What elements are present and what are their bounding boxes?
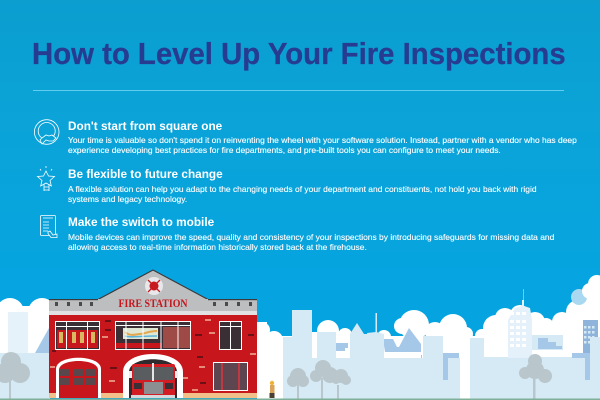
window insets on light buildings xyxy=(443,338,590,380)
roof pediment xyxy=(98,270,208,311)
brick wall xyxy=(49,315,257,393)
text: square one: Your time is valuable so don't spend it on reinventing the wheel with your software solution. Instead, partner with a vendor who has deep xyxy=(68,135,577,145)
upper right window xyxy=(219,321,242,350)
text: mobile xyxy=(68,232,554,252)
heading: square one: Don't start from square one xyxy=(68,119,222,133)
lower right window xyxy=(213,362,248,391)
center bay with fire engine xyxy=(123,354,183,398)
icon: mobile tablet with hand xyxy=(40,215,58,238)
text: flexible xyxy=(68,184,537,204)
text: flexible: A flexible solution can help you adapt to the changing needs of your department and constituents, not hold you back with rigid xyxy=(68,184,537,194)
firefighter xyxy=(270,381,274,398)
left garage door xyxy=(56,358,101,398)
heading: flexible: Be flexible to future change xyxy=(68,167,223,181)
text: square one xyxy=(68,135,577,155)
heading: mobile: Make the switch to mobile xyxy=(68,215,214,229)
back buildings medium blue xyxy=(35,328,422,363)
text: mobile: allowing access to real-time information historically stored back at the firehouse. xyxy=(68,242,367,252)
title: How to Level Up Your Fire Inspections xyxy=(32,37,566,71)
bricks xyxy=(50,319,256,391)
tower windows, right xyxy=(583,320,598,353)
trees xyxy=(0,352,552,399)
text: square one: experience developing best practices for fire departments, and pre-built tools you can configure to meet your needs. xyxy=(68,145,501,155)
front buildings light blue xyxy=(0,310,600,400)
upper left window xyxy=(55,321,100,350)
icon: handshake in circle xyxy=(34,119,60,145)
text: flexible: systems and legacy technology. xyxy=(68,194,187,204)
sign text: FIRE STATION xyxy=(118,296,188,310)
upper middle window xyxy=(115,321,191,350)
tower with windows xyxy=(508,289,532,358)
divider line xyxy=(33,90,564,91)
fire station xyxy=(49,270,257,398)
icon: star on ladder xyxy=(36,166,56,191)
emblem xyxy=(145,277,163,295)
text: mobile: Mobile devices can improve the speed, quality and consistency of your inspections by introducing safeguards for missing data and xyxy=(68,232,554,242)
ground xyxy=(0,398,600,400)
clouds xyxy=(0,275,600,400)
